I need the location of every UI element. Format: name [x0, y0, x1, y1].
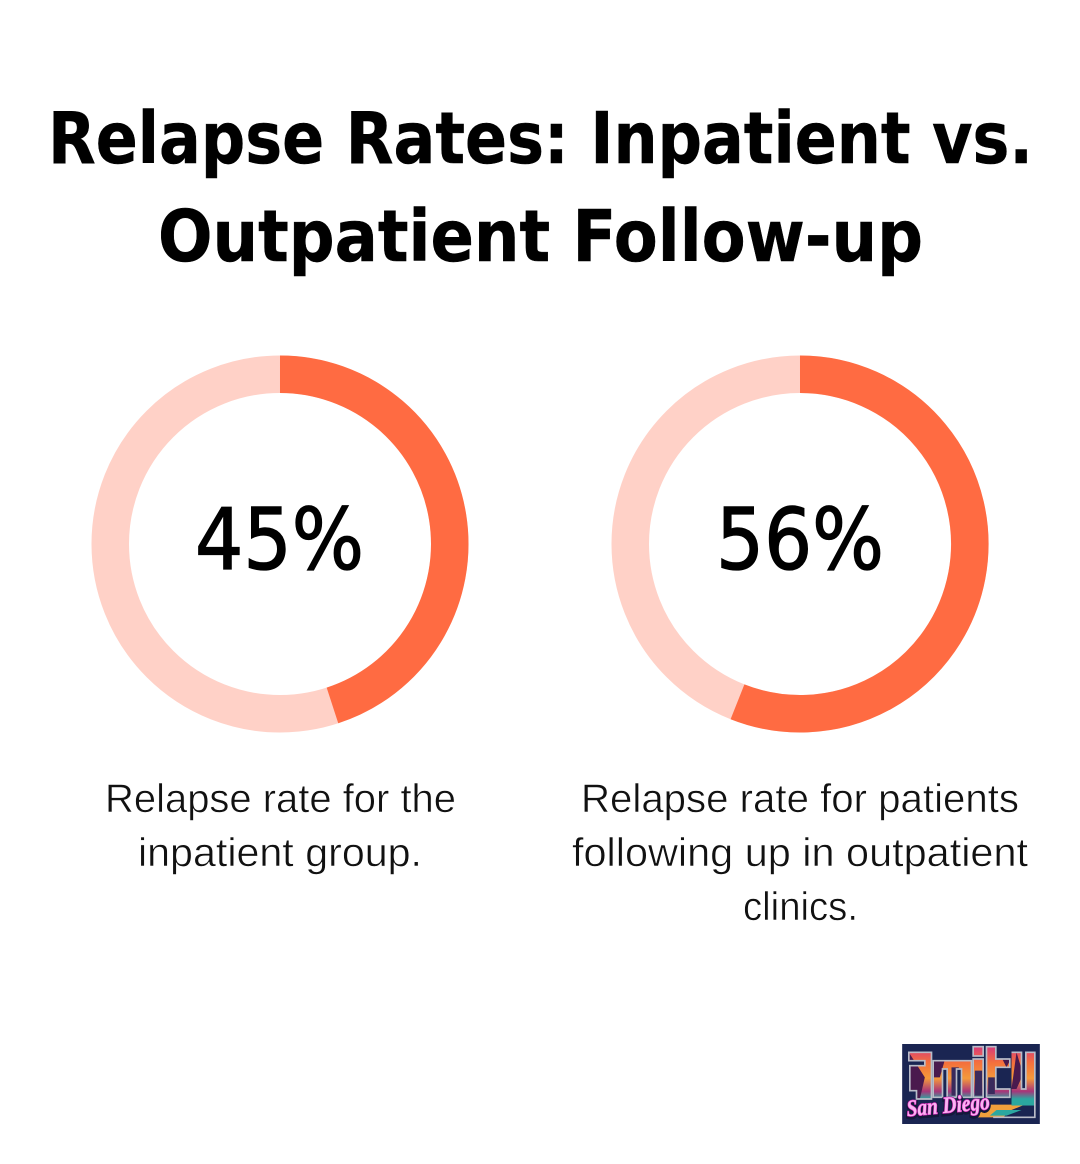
caption: outpatient: Relapse rate for patients [581, 777, 1019, 821]
logo: Amity San Diego [902, 1044, 1040, 1124]
logo: Amity San Diego: San Diego [906, 1089, 991, 1122]
value: 56%: 56% [716, 491, 884, 590]
donut chart: 45% [110, 374, 450, 714]
panel: inpatient relapse rate [105, 374, 456, 875]
caption: outpatient [572, 777, 1028, 929]
title: Outpatient Follow-up [158, 195, 923, 278]
caption: outpatient: following up in outpatient [572, 831, 1028, 875]
panel: outpatient relapse rate [572, 374, 1028, 929]
donut chart: 56% [630, 374, 970, 714]
caption: inpatient [105, 777, 456, 875]
title [48, 97, 1033, 278]
sunset strip behind script [975, 1105, 1025, 1117]
caption: inpatient: Relapse rate for the [105, 777, 456, 821]
caption: outpatient: clinics. [743, 885, 858, 929]
logo: Amity San Diego: San Diego [906, 1090, 991, 1124]
value: 45%: 45% [195, 491, 364, 590]
caption: inpatient: inpatient group. [138, 831, 422, 875]
